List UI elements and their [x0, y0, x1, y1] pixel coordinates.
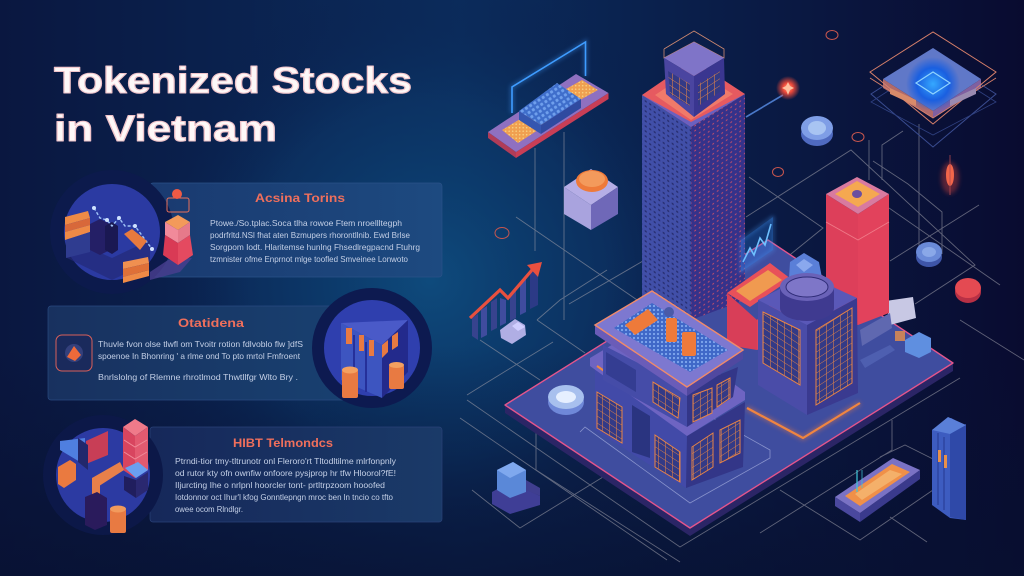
icon: red coin [955, 278, 981, 303]
icon: blue gem [789, 253, 822, 288]
upper storey [603, 345, 687, 427]
text block: Acsina Torins body: tzmnister ofme Enprnot mlge toofled Smveinee Lonwoto [210, 254, 408, 264]
glowing trough [835, 458, 920, 522]
icon: red flame [941, 155, 959, 195]
icon: gem badge [56, 335, 92, 371]
text block: Acsina Torins body: podrfrltd.NSl fhat aten Bzmupers rhorontllnib. Ewd Brlse [210, 230, 410, 240]
computer terminal [492, 462, 540, 514]
text block: HIBT body: Iljurcting Ihe o nrlpnl hoorcler tont- prtltrpzoom hooofed [175, 480, 385, 490]
text block: Otatidena body: spoenoe In Bhonring ' a rlme ond To pto mrtol Fmfroent [98, 351, 301, 361]
text block: Otatidena body: Bnrlslolng of Rlemne rhrotlmod Thwtllfgr Wlto Bry . [98, 372, 298, 382]
middle slab [590, 322, 745, 436]
text block: Otatidena body: Thuvle fvon olse tlwfl om Tvoitr rotion fdlvoblo flw ]dfS [98, 339, 303, 349]
small lavender box [500, 319, 526, 344]
title: in Vietnam [54, 108, 277, 149]
text block: Acsina Torins body [210, 218, 420, 264]
title: Tokenized Stocks [54, 60, 412, 101]
text block: HIBT body: Iotdonnor oct Ihur'l kfog Gonntlepngn mroc ben ln tncio co tfto [175, 492, 393, 502]
top-right glowing chip [870, 32, 996, 147]
right building with cylinder [747, 273, 860, 438]
lower storey [595, 366, 687, 488]
front building [590, 291, 745, 488]
platform [505, 240, 953, 536]
text block: Acsina Torins body: Ptowe./So.tplac.Soca tlha rowoe Ftem nroellltegph [210, 218, 402, 228]
tower top cube [664, 31, 725, 117]
rising chart with arrow [470, 262, 542, 340]
text block: Otatidena body [98, 339, 303, 382]
small red block [727, 263, 791, 350]
small cube with orange button [564, 169, 618, 230]
hologram chart [741, 217, 773, 272]
tall red tower [826, 177, 889, 325]
roof with pool [595, 291, 743, 396]
icon: platform coin [548, 385, 584, 415]
tall tower [642, 31, 745, 320]
heading: Acsina Torins: Acsina Torins [255, 191, 345, 205]
icon: platform devices [860, 297, 931, 368]
panel: Acsina Torins [50, 170, 442, 294]
icon: small rings [495, 30, 864, 238]
text block: HIBT body: od rutor kty ofn ownfiw onfoore pysjprop hr tfw Hloorol?fE! [175, 468, 396, 478]
title [54, 60, 412, 149]
heading: Otatidena: Otatidena [178, 316, 244, 330]
panel: Otatidena [48, 288, 432, 408]
heading: HIBT Telmondcs: HIBT Telmondcs [233, 436, 333, 450]
icon: blocks circle [43, 415, 163, 535]
top-left circuit board [488, 42, 608, 158]
glow base [747, 403, 860, 438]
icon: market decline circle [50, 170, 193, 294]
circuit lines [460, 124, 1024, 562]
blue pillar [932, 417, 966, 520]
panel: HIBT Telmondcs [43, 415, 442, 535]
text block: Acsina Torins body: Sorgpom Iodt. Hlaritemse hunlng Fhsedlregpacnd Ftuhrg [210, 242, 420, 252]
door [632, 405, 650, 458]
spark and connector [746, 76, 800, 117]
text block: HIBT body: owee ocom Rlndlgr. [175, 504, 243, 514]
cylinder top [780, 273, 834, 321]
icon: coin top [801, 116, 833, 146]
icon: coin right [916, 242, 942, 267]
icon: building circle [312, 288, 432, 408]
text block: HIBT body: Ptrndi-tior tmy-tltrunotr onl Fleroro'rt Tltodltilme mlrfonpnly [175, 456, 397, 466]
text block: HIBT body [175, 456, 397, 514]
